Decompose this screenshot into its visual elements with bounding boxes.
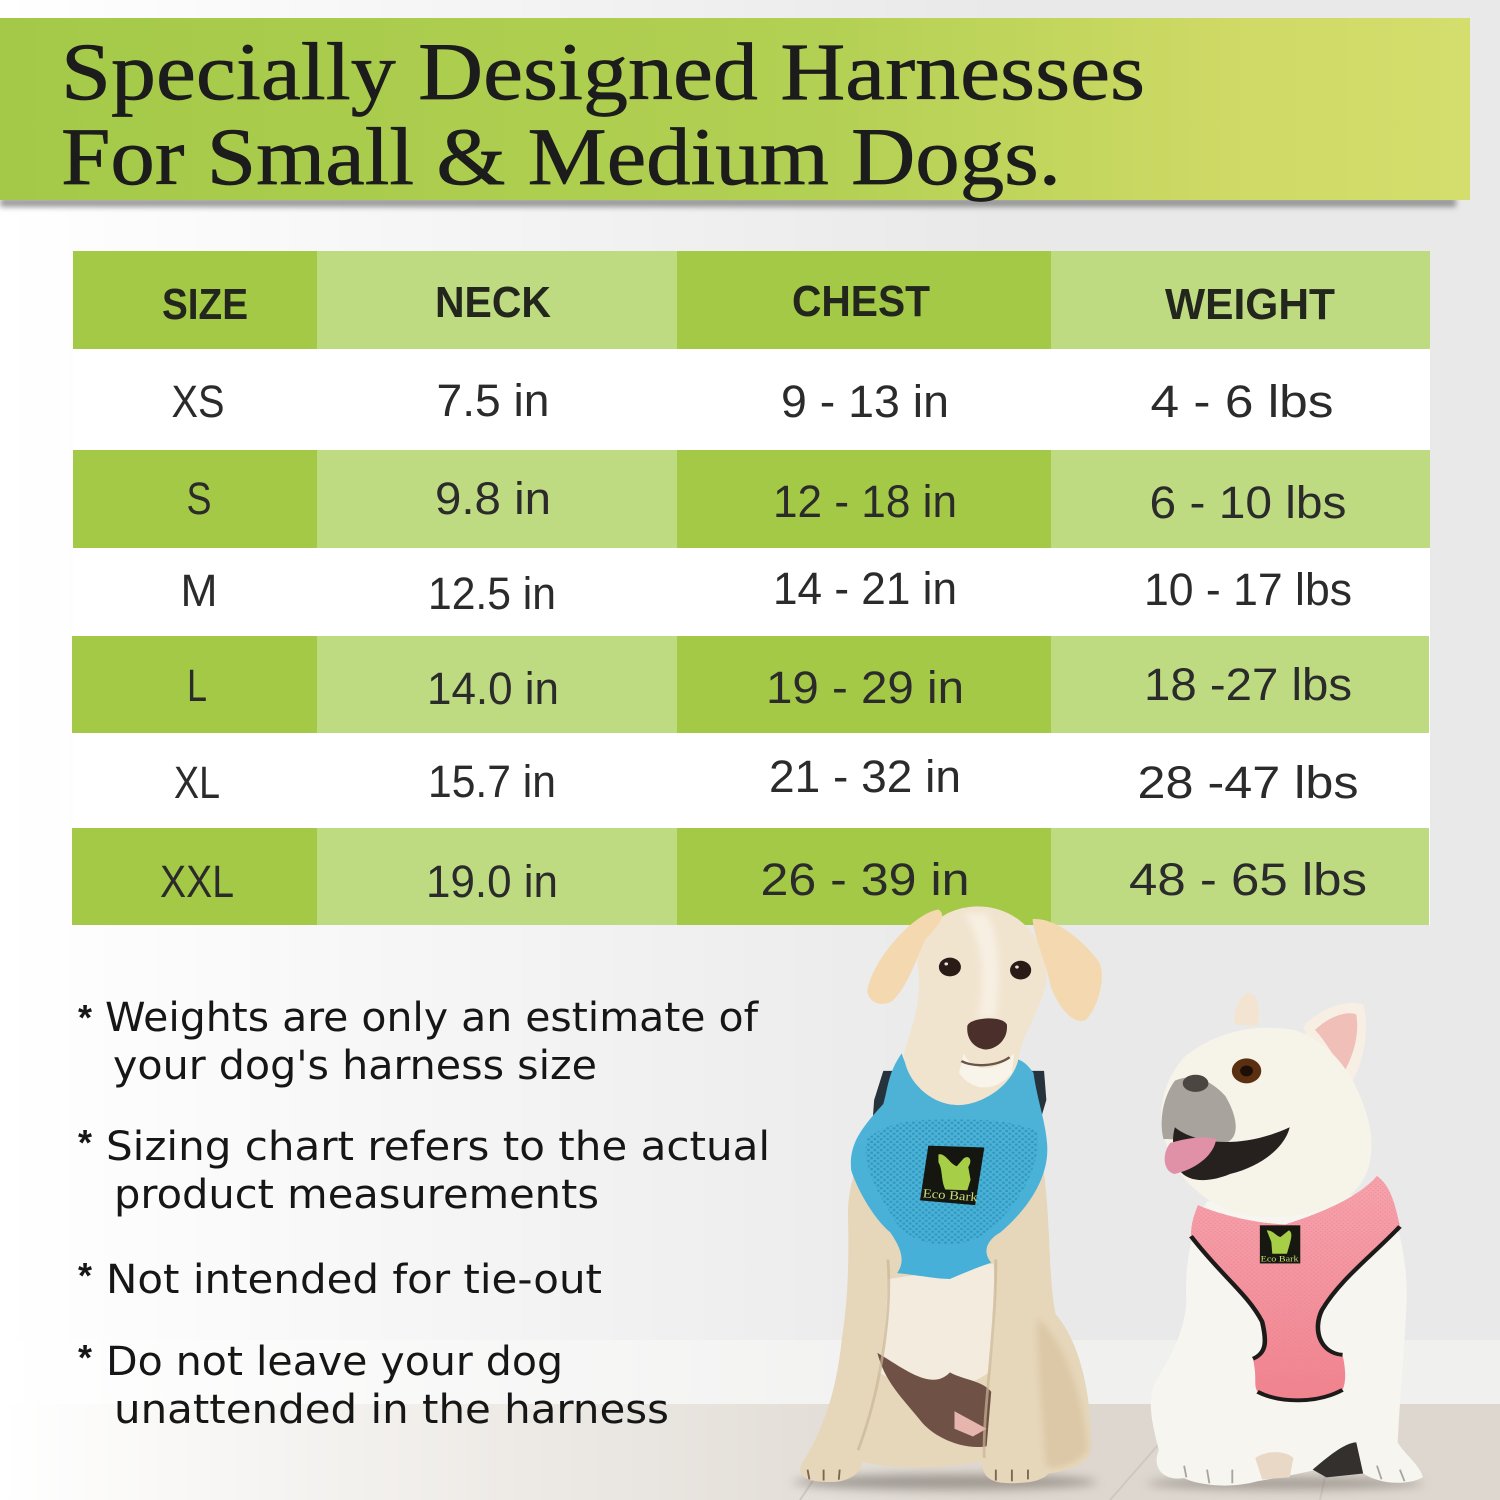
row: L: 14.0 in xyxy=(427,663,559,714)
harness logo patch: Eco Bark xyxy=(922,1186,979,1204)
body xyxy=(800,1108,1091,1483)
eyes xyxy=(939,958,961,976)
row: XL xyxy=(174,751,1358,808)
row: L xyxy=(72,636,1429,733)
row: XXL: 19.0 in xyxy=(426,856,558,907)
row: S: 9.8 in xyxy=(435,473,551,524)
title xyxy=(61,26,1145,202)
row: XL: 28 -47 lbs xyxy=(1138,757,1358,808)
row: M: M xyxy=(180,565,218,616)
row: S: 6 - 10 lbs xyxy=(1150,477,1346,528)
ears xyxy=(867,909,942,1004)
notes xyxy=(78,995,770,1433)
row: S: 12 - 18 in xyxy=(773,476,957,527)
head xyxy=(1161,993,1371,1217)
size table xyxy=(72,251,1430,925)
row: L: 18 -27 lbs xyxy=(1144,659,1352,710)
note: sizing chart: Sizing chart refers to the actual xyxy=(106,1124,770,1170)
muzzle xyxy=(1162,1078,1236,1143)
note: sizing chart: * xyxy=(78,1122,92,1163)
row: XL: XL xyxy=(174,757,220,808)
title: For Small & Medium Dogs. xyxy=(61,111,1061,202)
row: XS xyxy=(172,375,1334,427)
header row: CHEST xyxy=(792,277,930,326)
dogs photo xyxy=(794,906,1423,1490)
header row: SIZE xyxy=(162,280,248,329)
row: XXL: 48 - 65 lbs xyxy=(1129,854,1367,905)
harness logo patch xyxy=(1260,1225,1300,1264)
note: sizing chart xyxy=(78,1122,770,1218)
title: Specially Designed Harnesses xyxy=(61,26,1145,117)
row: S: S xyxy=(186,473,212,524)
note: unattended: * xyxy=(78,1337,92,1378)
harness xyxy=(851,1053,1047,1279)
dog: french bulldog in pink harness xyxy=(1147,993,1423,1489)
row: XXL xyxy=(72,828,1429,925)
row: S xyxy=(73,450,1430,548)
row: L: 19 - 29 in xyxy=(766,662,964,713)
harness logo patch: Eco Bark xyxy=(1261,1255,1299,1264)
header row: NECK xyxy=(435,278,551,327)
note: weights: your dog's harness size xyxy=(113,1043,597,1089)
harness xyxy=(1191,1176,1400,1400)
row: XS: 7.5 in xyxy=(436,375,550,426)
note: tie-out: Not intended for tie-out xyxy=(106,1257,602,1303)
eye xyxy=(1232,1058,1261,1083)
mouth xyxy=(1173,1127,1290,1180)
row: XS: 9 - 13 in xyxy=(781,376,949,427)
body xyxy=(1151,1193,1423,1486)
row: XXL: XXL xyxy=(160,856,234,907)
row: XS: 4 - 6 lbs xyxy=(1150,376,1334,427)
header row: WEIGHT xyxy=(1165,280,1335,329)
header row xyxy=(73,251,1430,349)
row: XXL: 26 - 39 in xyxy=(760,854,970,905)
note: weights: Weights are only an estimate of xyxy=(105,995,759,1041)
note: unattended: unattended in the harness xyxy=(114,1387,669,1433)
note: unattended: Do not leave your dog xyxy=(106,1339,563,1385)
row: XS: XS xyxy=(172,376,224,427)
harness logo patch xyxy=(920,1146,984,1205)
dog: labrador puppy in blue harness xyxy=(794,906,1102,1490)
tongue xyxy=(1165,1137,1216,1174)
banner xyxy=(0,18,1470,207)
row: M: 10 - 17 lbs xyxy=(1144,564,1352,615)
row: XL: 15.7 in xyxy=(428,756,556,807)
note: weights xyxy=(78,995,759,1089)
note: sizing chart: product measurements xyxy=(114,1172,599,1218)
row: XL: 21 - 32 in xyxy=(769,751,961,802)
note: unattended xyxy=(78,1337,669,1433)
row: M: 14 - 21 in xyxy=(773,563,957,614)
haunch shading xyxy=(1037,1318,1088,1467)
row: M: 12.5 in xyxy=(428,568,556,619)
row: L: L xyxy=(187,660,207,711)
note: weights: * xyxy=(78,997,92,1038)
nose xyxy=(967,1018,1007,1049)
note: tie-out: * xyxy=(78,1255,92,1296)
head xyxy=(867,906,1102,1105)
row: M xyxy=(180,563,1352,619)
